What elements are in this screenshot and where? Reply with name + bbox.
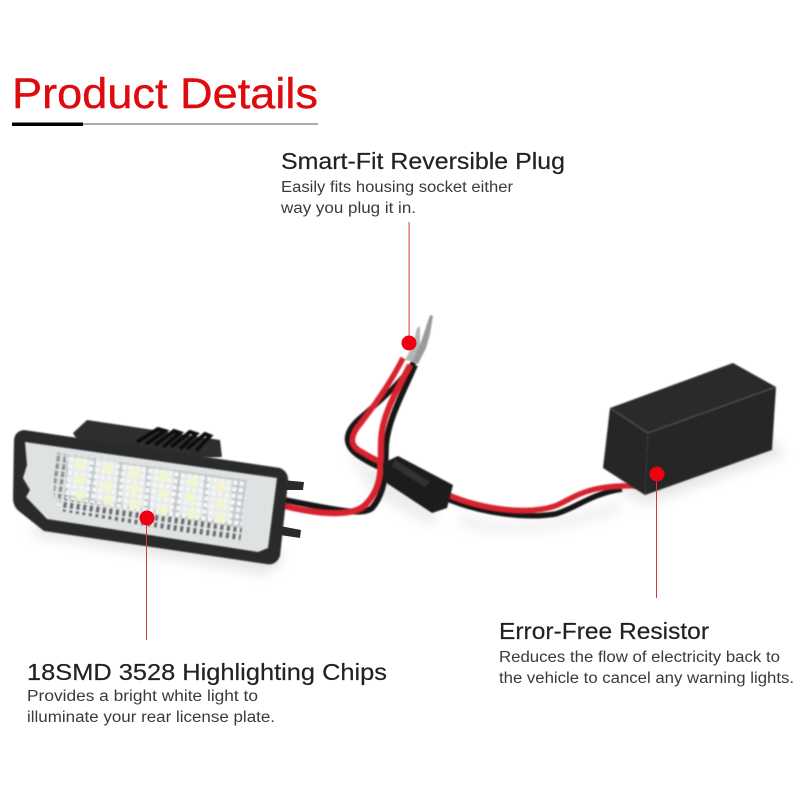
wires: resistor lead: [442, 486, 640, 516]
heading: error-free resistor: Error-Free Resistor: [499, 618, 709, 644]
bright LEDs: [74, 460, 226, 524]
connector: [383, 456, 453, 513]
LED chip grid: [54, 452, 247, 542]
resistor box: [603, 363, 776, 495]
callout: plug pointer: [402, 222, 416, 350]
box side face: [645, 387, 776, 495]
callout: resistor pointer: [650, 466, 664, 598]
text: chips description: illuminate your rear license plate.: [27, 709, 275, 726]
text: resistor description: the vehicle to cancel any warning lights.: [499, 670, 794, 687]
box top face: [610, 363, 776, 433]
callout: chips pointer: [140, 510, 154, 640]
lamp housing: [13, 420, 304, 564]
text: plug description: way you plug it in.: [280, 200, 416, 217]
lamp lens: [23, 442, 277, 552]
plug pins: [405, 315, 433, 364]
box front face: [603, 408, 648, 495]
title: Product Details: [12, 70, 318, 118]
heading: smart-fit reversible plug: Smart-Fit Reversible Plug: [281, 148, 565, 174]
text: chips description: Provides a bright white light to: [27, 688, 258, 705]
soft shadows under product: [30, 440, 785, 575]
lamp back with fins: [73, 420, 222, 460]
text: resistor description: Reduces the flow of electricity back to: [499, 649, 780, 666]
lamp tabs: [280, 480, 304, 538]
text: plug description: Easily fits housing socket either: [281, 179, 513, 196]
box ridge: [610, 387, 776, 433]
lamp outer frame: [13, 430, 288, 564]
heading: highlighting chips: 18SMD 3528 Highlighting Chips: [27, 659, 387, 685]
wires: loop to plug pins: [284, 358, 415, 513]
wire entry into box: [590, 483, 641, 489]
title underline: [12, 122, 318, 126]
